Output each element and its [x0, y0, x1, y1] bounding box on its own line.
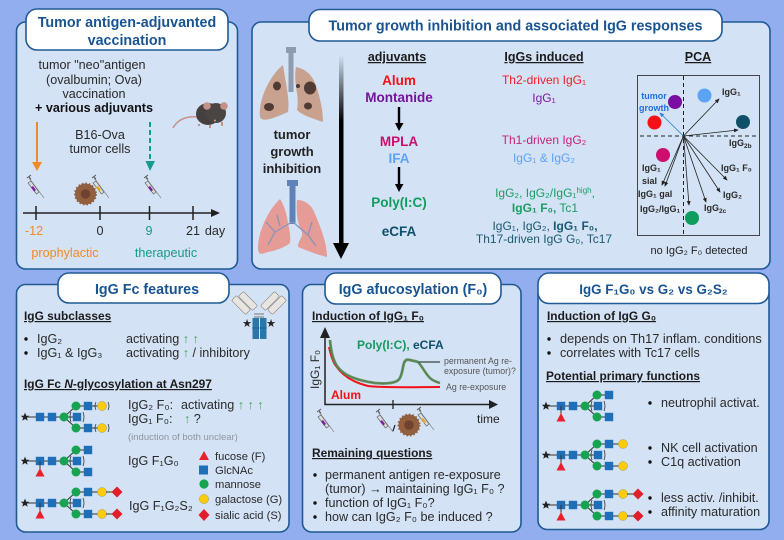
text: vaccination description: (ovalbumin; Ova): [46, 73, 142, 87]
heading: IgG Fc features: [58, 273, 229, 303]
text: glycan labels: IgG₁ F₀:: [128, 412, 172, 426]
heading: tumor growth inhibition: Tumor growth inhibition and associated IgG responses: [329, 18, 702, 34]
column: IgGs induced: IgG₂, IgG₂/IgG₁: [495, 186, 576, 200]
panel: tumor antigen-adjuvanted vaccination: [16, 9, 238, 269]
arrow: gradient inhibition axis: [333, 55, 349, 259]
column: adjuvants: [365, 50, 433, 239]
text: tumor growth inhibition: inhibition: [263, 161, 321, 176]
chart: PCA: IgG₁: [722, 87, 741, 97]
text: tumor cells: [70, 128, 130, 156]
chart: IgG1 F0 over time: Alum: [331, 388, 361, 402]
chart: IgG1 F0 over time: [308, 327, 516, 426]
chart: PCA: IgG: [704, 203, 719, 213]
text: glycan labels: activating ↑ ↑ ↑: [181, 398, 264, 412]
text: induction of IgG G0: [547, 309, 762, 360]
text: tumor growth inhibition: [263, 127, 321, 176]
icon: syringes and tumor cell: [27, 175, 161, 204]
text: glycan labels: (induction of both unclear): [128, 432, 238, 443]
icon: glycan G2: [542, 440, 628, 470]
heading: IgG afucosylation: [325, 273, 501, 304]
timeline: -12: [25, 224, 43, 238]
text: functions: neutrophil activat.: [661, 396, 760, 410]
text: glycan labels: [128, 398, 264, 513]
column: adjuvants: Montanide: [365, 90, 433, 105]
timeline: therapeutic: [135, 246, 197, 260]
icon: glycan F1G0: [21, 446, 92, 476]
text: functions: NK cell activation: [661, 441, 758, 455]
text: IgG subclasses: activating ↑ ↑: [126, 332, 199, 346]
text: tumor cells: B16-Ova: [75, 128, 125, 142]
chart: IgG1 F0 over time: Poly(I:C), eCFA: [357, 338, 444, 352]
chart: PCA: IgG₁ F₀: [721, 163, 752, 173]
column: IgGs induced: Th17-driven IgG G₀, Tc17: [476, 232, 612, 246]
legend: glycan residues: galactose (G): [215, 494, 282, 506]
column: IgGs induced: IgG₁: [532, 91, 556, 105]
heading: IgG Fc features: IgG Fc features: [95, 282, 199, 298]
chart: PCA: sial: [642, 176, 657, 186]
chart: PCA: tumor: [641, 91, 667, 101]
timeline: 9: [145, 224, 153, 238]
chart: PCA: IgG: [729, 138, 744, 148]
text: remaining questions: [312, 446, 505, 524]
legend: glycan residues: sialic acid (S): [215, 510, 282, 522]
icon: glycan F1G2S2: [21, 486, 123, 520]
text: vaccination description: + various adjuvants: [35, 101, 153, 115]
chart: PCA: growth: [639, 103, 669, 113]
icon: healthy lungs: [258, 180, 327, 257]
column: IgGs induced: IgGs induced: [504, 50, 584, 64]
text: induction of IgG G0: depends on Th17 inflam. conditions: [560, 331, 762, 346]
heading: IgG afucosylation: IgG afucosylation (F₀): [339, 282, 488, 298]
text: vaccination description: tumor "neo"antigen: [39, 58, 145, 72]
chart: PCA: IgG₂: [723, 190, 742, 200]
text: glycan labels: IgG F₁G₀: [128, 454, 179, 468]
chart: PCA: no IgG₂ F₀ detected: [651, 245, 747, 257]
text: IgG subclasses: activating ↑ / inhibitory: [126, 346, 251, 360]
column: adjuvants: adjuvants: [368, 50, 426, 64]
heading: F1G0 vs G2 vs G2S2: IgG F₁G₀ vs G₂ vs G₂S₂: [579, 282, 728, 297]
legend: glycan residues: mannose: [215, 479, 261, 491]
column: IgGs induced: IgG₁ & IgG₂: [513, 151, 575, 165]
column: IgGs induced: Th1-driven IgG₂: [502, 133, 587, 147]
text: remaining questions: function of IgG₁ F₀?: [325, 496, 435, 510]
chart: IgG1 F0 over time: exposure (tumor)?: [444, 366, 516, 376]
timeline: 0: [96, 224, 104, 238]
column: IgGs induced: [476, 50, 612, 246]
column: IgGs induced: Th2-driven IgG₁: [502, 73, 586, 87]
chart: PCA: [638, 50, 760, 257]
icon: glycan G2S2: [542, 488, 644, 522]
arrow: prophylactic: [32, 122, 42, 171]
arrow: therapeutic: [146, 122, 155, 171]
text: glycan labels: IgG F₁G₂S₂: [129, 499, 193, 513]
column: IgGs induced: IgG₁, IgG₂, IgG₁ F₀,: [492, 219, 598, 233]
chart: IgG1 F0 over time: permanent Ag re-: [444, 356, 512, 366]
text: tumor growth inhibition: tumor: [274, 127, 310, 142]
chart: PCA: 2b: [744, 143, 752, 150]
heading: vaccination: [26, 9, 228, 50]
icon: antibody: ★: [266, 318, 276, 330]
column: IgGs induced: IgG₁ F₀, Tc1: [512, 201, 578, 215]
text: functions: C1q activation: [661, 455, 741, 469]
legend: glycan residues: [198, 451, 282, 522]
text: functions: [648, 396, 760, 519]
text: IgG subclasses: [24, 309, 251, 360]
heading: potential primary functions: Potential primary functions: [546, 369, 700, 383]
heading: F1G0 vs G2 vs G2S2: [538, 273, 769, 304]
chart: IgG1 F0 over time: time: [477, 412, 500, 426]
heading: induction of IgG1 F0: Induction of IgG₁ F₀: [312, 309, 424, 323]
chart: IgG1 F0 over time: Ag re-exposure: [446, 382, 506, 392]
timeline: 21: [186, 224, 200, 238]
timeline: day: [205, 224, 226, 238]
text: IgG subclasses: IgG₂: [37, 332, 62, 346]
icon: syringes and tumor cell: [317, 407, 434, 436]
panel: IgG Fc features: [16, 273, 289, 532]
icon: antibody: [231, 291, 287, 339]
text: glycan labels: IgG₂ F₀:: [128, 398, 173, 412]
legend: glycan residues: GlcNAc: [215, 465, 253, 477]
text: N-glycosylation heading: IgG Fc N-glycosylation at Asn297: [24, 377, 212, 391]
chart: PCA: PCA: [685, 50, 711, 64]
text: IgG subclasses: IgG subclasses: [24, 309, 112, 323]
text: functions: affinity maturation: [661, 505, 760, 519]
text: vaccination description: vaccination: [62, 87, 126, 101]
column: IgGs induced: ,: [592, 186, 595, 200]
column: adjuvants: eCFA: [382, 224, 417, 239]
text: glycan labels: ↑ ?: [184, 412, 201, 426]
icon: glycan G0: [542, 390, 613, 422]
column: IgGs induced: high: [576, 186, 592, 195]
text: tumor cells: tumor cells: [70, 142, 130, 156]
column: adjuvants: MPLA: [380, 134, 418, 149]
heading: vaccination: vaccination: [88, 33, 166, 49]
chart: PCA: IgG₂/IgG₁: [640, 204, 680, 214]
panel: tumor growth inhibition and IgG responses: [252, 10, 770, 269]
timeline: prophylactic: [31, 246, 99, 260]
heading: tumor growth inhibition: [309, 10, 722, 41]
timeline: [23, 206, 226, 260]
panel: IgG F1G0 vs G2 vs G2S2: [538, 273, 769, 530]
chart: PCA: 2c: [719, 208, 727, 215]
column: adjuvants: Alum: [382, 73, 416, 88]
chart: PCA: IgG₁: [642, 163, 661, 173]
heading: vaccination: Tumor antigen-adjuvanted: [38, 15, 216, 31]
text: remaining questions: how can IgG₂ F₀ be induced ?: [325, 510, 493, 524]
panel: IgG afucosylation: [302, 273, 521, 532]
text: functions: less activ. /inhibit.: [661, 491, 759, 505]
text: remaining questions: permanent antigen re-exposure: [325, 468, 501, 482]
text: remaining questions: Remaining questions: [312, 446, 433, 460]
chart: IgG1 F0 over time: IgG₁ F₀: [308, 350, 322, 389]
icon: tumor lungs: [260, 47, 323, 122]
icon: mouse: [173, 102, 228, 128]
column: adjuvants: Poly(I:C): [371, 195, 427, 210]
text: induction of IgG G0: correlates with Tc17 cells: [560, 346, 700, 360]
text: IgG subclasses: IgG₁ & IgG₃: [37, 346, 102, 360]
icon: glycan G2: [21, 402, 109, 432]
column: adjuvants: IFA: [388, 151, 410, 166]
chart: PCA: IgG₁ gal: [638, 189, 672, 199]
text: vaccination description: [35, 58, 153, 115]
text: induction of IgG G0: Induction of IgG G₀: [547, 309, 656, 323]
text: remaining questions: (tumor) → maintaining IgG₁ F₀ ?: [325, 482, 505, 496]
legend: glycan residues: fucose (F): [215, 451, 266, 463]
icon: antibody: ★: [242, 318, 252, 330]
text: tumor growth inhibition: growth: [270, 144, 314, 159]
